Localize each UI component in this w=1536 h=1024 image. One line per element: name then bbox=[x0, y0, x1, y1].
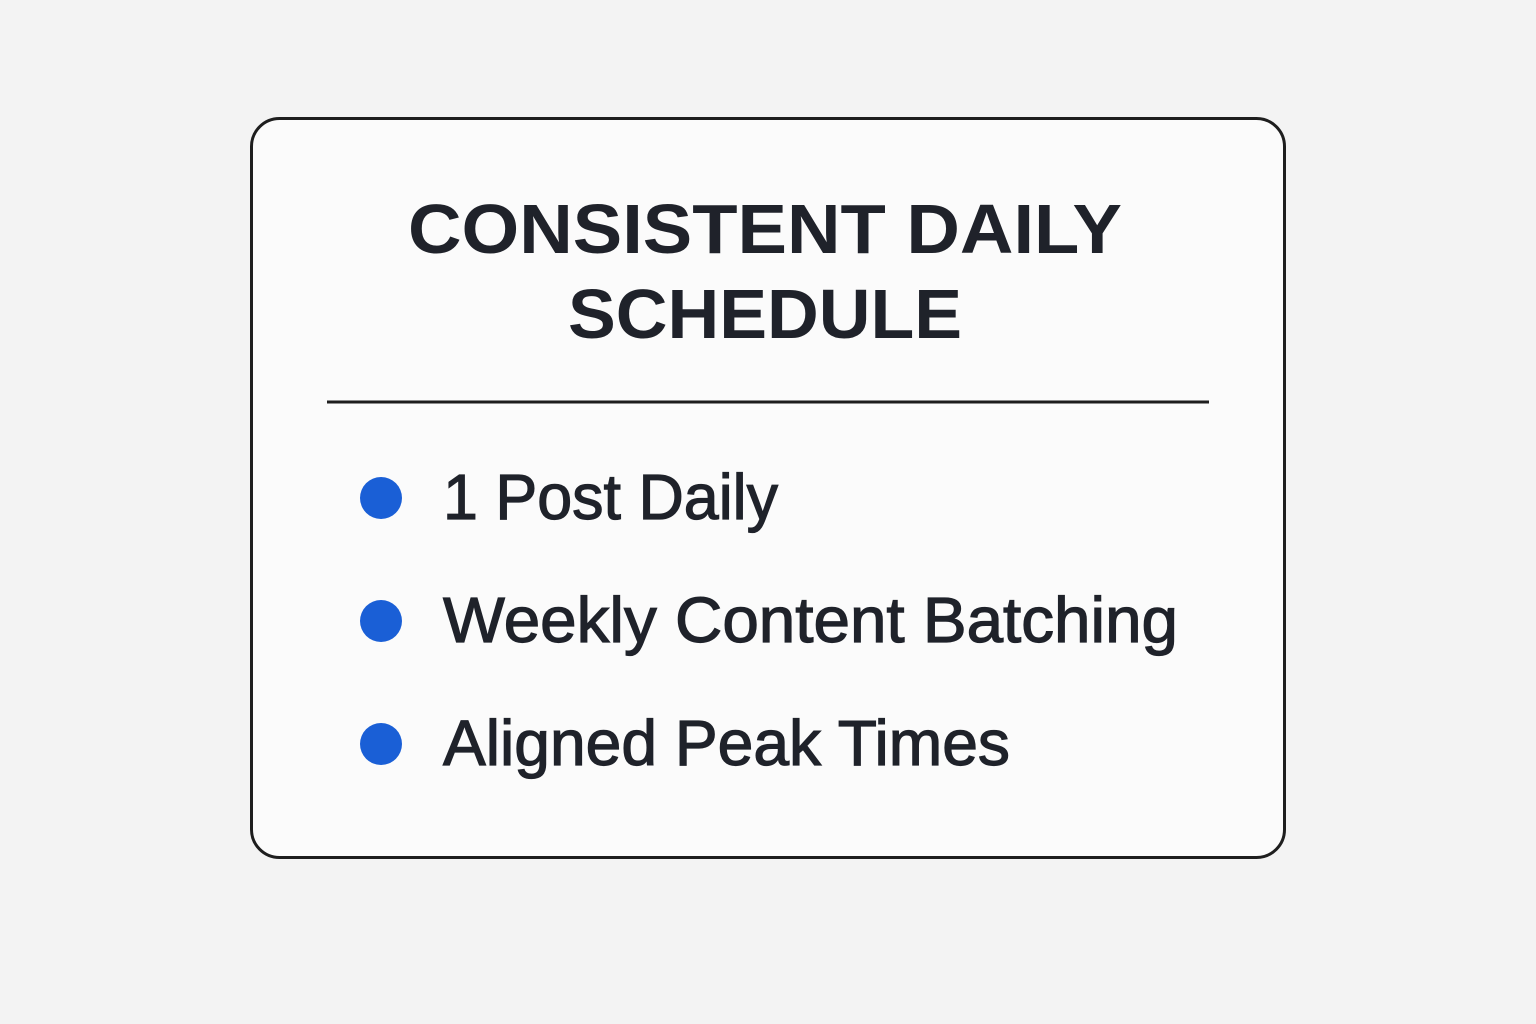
item: Aligned Peak Times: Aligned Peak Times bbox=[443, 707, 1010, 779]
title: SCHEDULE bbox=[568, 275, 962, 353]
item: Weekly Content Batching: Weekly Content Batching bbox=[443, 584, 1178, 656]
panel: schedule card bbox=[252, 118, 1284, 858]
list: schedule items bbox=[360, 461, 1178, 779]
item: 1 Post Daily: 1 Post Daily bbox=[443, 461, 778, 533]
title bbox=[408, 190, 1122, 353]
title: CONSISTENT DAILY bbox=[408, 190, 1122, 268]
